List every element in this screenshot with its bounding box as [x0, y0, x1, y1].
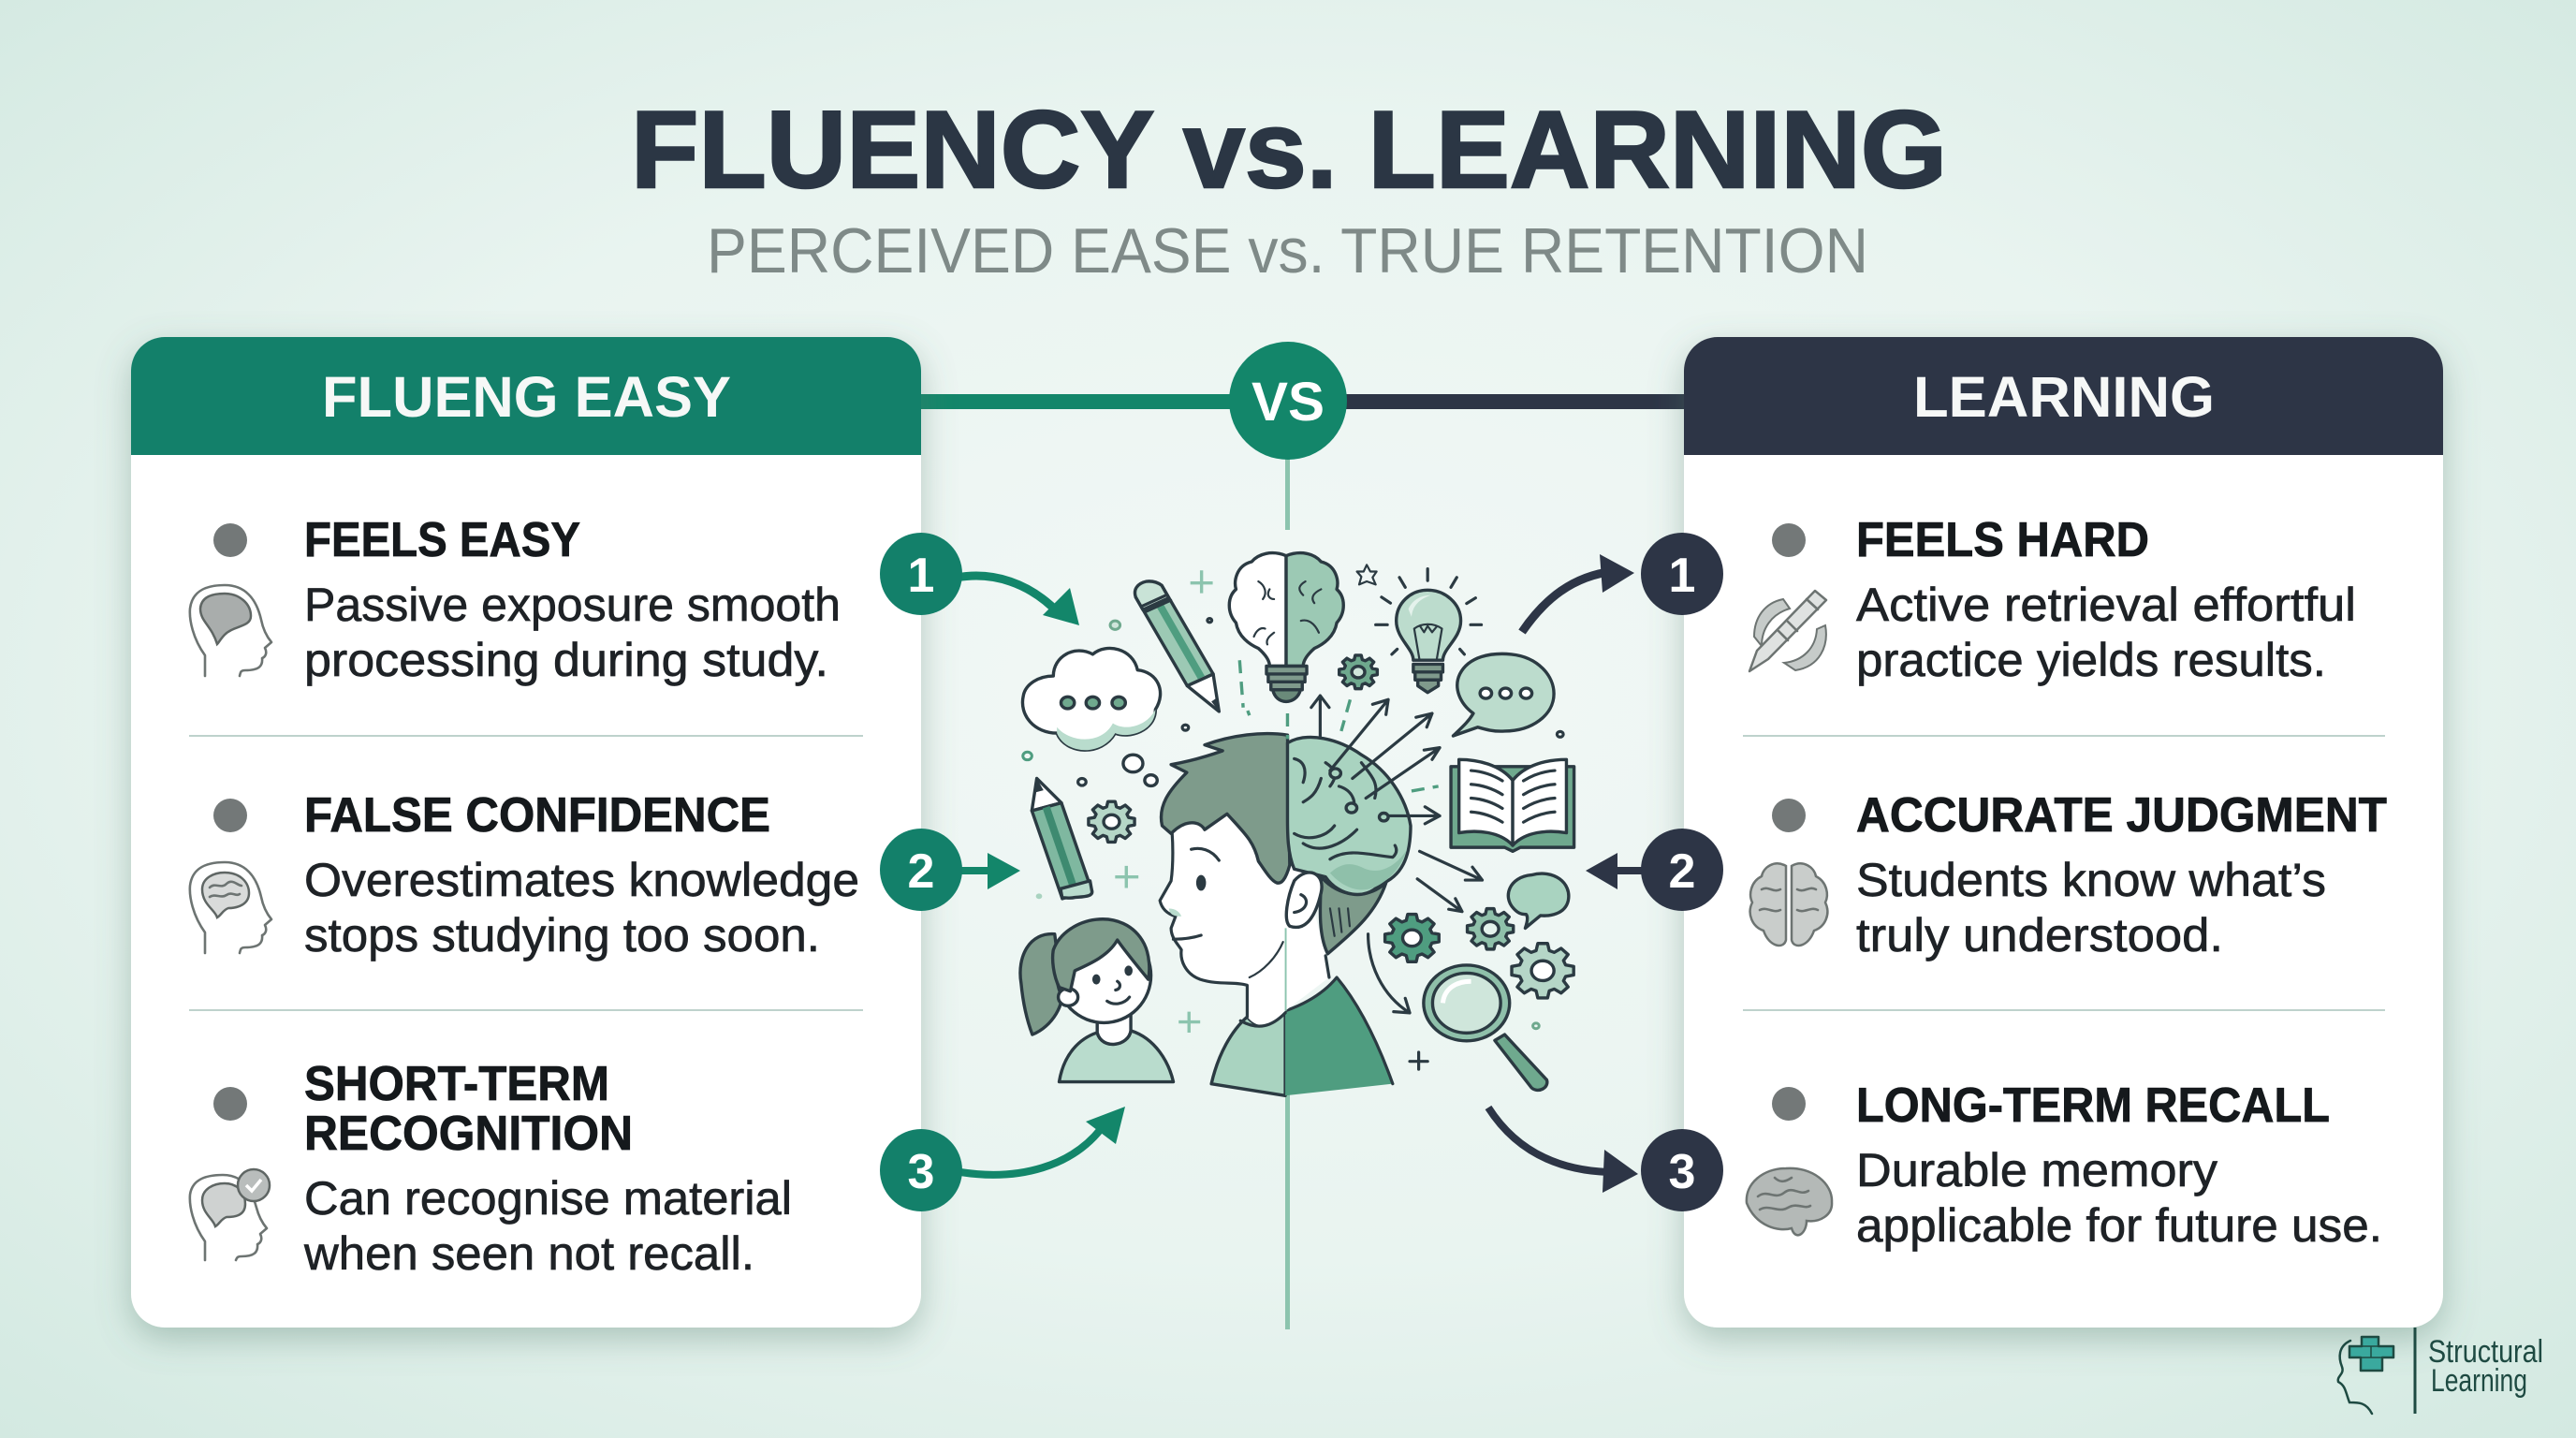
- icon: head with check mark: [190, 1169, 270, 1260]
- central vertical divider: [1285, 459, 1290, 1329]
- item: accurate judgment: [1750, 788, 2387, 961]
- item: long-term recall: Durable memory: [1856, 1144, 2217, 1196]
- icon: pencil top: [1134, 581, 1219, 712]
- arrow: learning 2 to centre: [1586, 853, 1652, 889]
- logo: Structural Learning: Structural: [2428, 1334, 2543, 1370]
- icons: gears: [1089, 655, 1573, 998]
- number badges: fluency: 2: [908, 844, 934, 899]
- item: feels hard: FEELS HARD: [1856, 513, 2149, 567]
- VS badge: [1229, 342, 1347, 460]
- title: FLUENCY vs. LEARNING: [631, 88, 1947, 211]
- arrow: learning 1 from centre: [1522, 554, 1634, 632]
- icon: side brain: [1747, 1168, 1832, 1235]
- icon: small speech bubble: [1508, 873, 1569, 928]
- thought cloud: [1022, 648, 1161, 785]
- girl figure: [1020, 919, 1173, 1082]
- item: long-term recall: applicable for future use.: [1856, 1199, 2382, 1252]
- number badges: learning: 3: [1669, 1145, 1695, 1199]
- item: long-term recall: [1747, 1078, 2382, 1252]
- number badges: learning: 1: [1669, 549, 1695, 603]
- item: false confidence: Overestimates knowledge: [304, 854, 859, 906]
- brain network arrows: [1311, 696, 1483, 1013]
- item: accurate judgment: truly understood.: [1856, 909, 2223, 961]
- boy figure: [1160, 734, 1411, 1095]
- icon: light bulb: [1376, 569, 1482, 693]
- item: false confidence: [190, 788, 859, 961]
- item: feels easy: FEELS EASY: [304, 513, 580, 567]
- item: short-term recognition: when seen not recall.: [303, 1227, 754, 1280]
- icon: head with brain: [190, 585, 271, 676]
- item: feels easy: [190, 513, 841, 686]
- subtitle: PERCEIVED EASE vs. TRUE RETENTION: [707, 215, 1868, 286]
- item: short-term recognition: Can recognise material: [304, 1172, 792, 1225]
- icon: brain light bulb: [1229, 553, 1343, 701]
- item: feels hard: [1749, 513, 2356, 686]
- icon: head with detailed brain: [190, 862, 271, 953]
- item: feels hard: Active retrieval effortful: [1856, 579, 2356, 631]
- arrow: learning 3 from centre: [1488, 1108, 1638, 1193]
- item: false confidence: stops studying too soon.: [304, 909, 820, 961]
- decorative sparkles and plus signs: [1023, 565, 1563, 1069]
- icon: pencil left: [1032, 778, 1092, 899]
- item: short-term recognition: [190, 1057, 792, 1280]
- panel heading: learning: LEARNING: [1913, 365, 2215, 429]
- panel header: learning: [1684, 337, 2443, 455]
- number badges: fluency: 1: [908, 549, 934, 603]
- item: long-term recall: LONG-TERM RECALL: [1856, 1078, 2330, 1133]
- logo: Structural Learning: Learning: [2431, 1363, 2527, 1399]
- item: feels hard: practice yields results.: [1856, 634, 2326, 686]
- icon: magnifying glass: [1424, 965, 1547, 1090]
- icon: brain halves: [1750, 863, 1827, 946]
- arrow: fluency 2 to centre: [955, 853, 1020, 889]
- panel header: fluency: [131, 337, 921, 455]
- central illustration: [1020, 553, 1574, 1095]
- item: accurate judgment: ACCURATE JUDGMENT: [1856, 788, 2387, 843]
- VS connector bars: [921, 394, 1685, 409]
- VS badge: VS: [1251, 372, 1325, 433]
- panel: learning: [1684, 337, 2443, 1328]
- arrow: fluency 3 to centre: [960, 1107, 1125, 1175]
- number badges: fluency: 3: [908, 1145, 934, 1199]
- number badges: fluency: [880, 533, 962, 1211]
- icon: open book: [1451, 759, 1574, 851]
- item: accurate judgment: Students know what’s: [1856, 854, 2326, 906]
- icon: pencil with cycle arrows: [1749, 591, 1826, 671]
- item: feels easy: Passive exposure smooth: [304, 579, 841, 631]
- item: false confidence: FALSE CONFIDENCE: [304, 788, 770, 843]
- panel: fluency: [131, 337, 921, 1328]
- logo: Structural Learning: [2338, 1328, 2543, 1414]
- item: short-term recognition: SHORT-TERM: [304, 1057, 609, 1111]
- number badges: learning: 2: [1669, 844, 1695, 899]
- number badges: learning: [1641, 533, 1723, 1211]
- item: feels easy: processing during study.: [304, 634, 828, 686]
- arrow: fluency 1 to centre: [957, 576, 1079, 625]
- item: short-term recognition: RECOGNITION: [304, 1107, 633, 1161]
- panel heading: fluency: FLUENG EASY: [322, 365, 731, 429]
- icon: speech bubble: [1453, 653, 1554, 736]
